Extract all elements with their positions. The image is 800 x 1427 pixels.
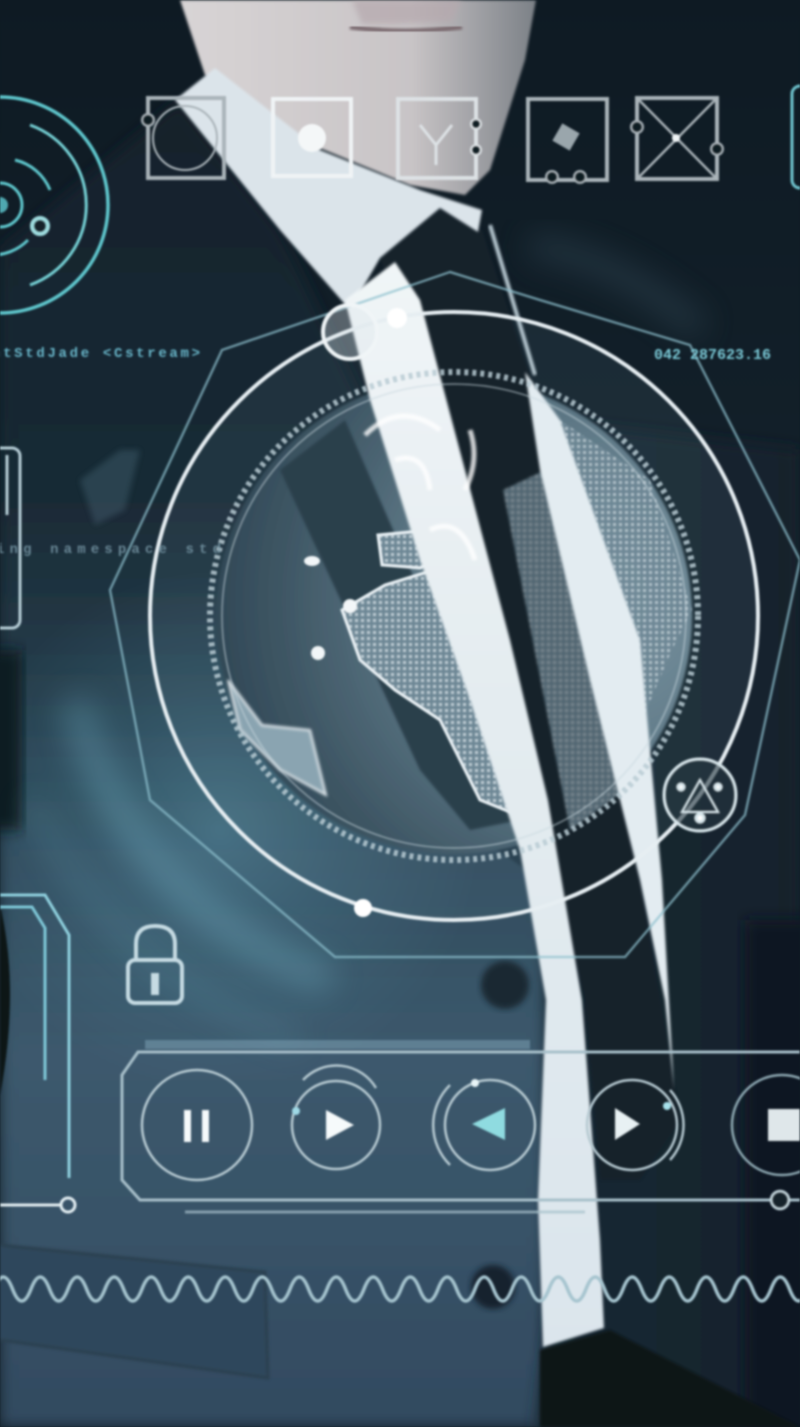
lapel shading: [275, 400, 540, 880]
globe backdrop: [150, 312, 758, 920]
upper right grid: [500, 410, 692, 780]
dark edge strip: [0, 650, 22, 830]
ring dot top: [387, 308, 407, 328]
radar node: [32, 218, 48, 234]
inner line: [0, 907, 45, 1080]
radar rings: [0, 97, 108, 313]
ring dot bottom: [354, 899, 372, 917]
outer bracket: [0, 895, 69, 1178]
triangle node icon: [664, 759, 736, 831]
mouth line: [350, 27, 462, 31]
dark band right: [745, 920, 800, 1427]
jacket right side: [535, 420, 800, 1427]
jacket left side: [0, 100, 545, 1427]
numeric text right: 042 287623.16: [654, 347, 771, 364]
shirt collar: [175, 68, 482, 310]
play button: [292, 1066, 380, 1169]
outer octagon: [110, 272, 800, 957]
inner thin ring: [222, 384, 686, 848]
left side tab: [0, 448, 20, 628]
island dots: [304, 556, 357, 660]
right side tab: [792, 86, 800, 188]
faded code text: ing namespace std: [0, 542, 221, 558]
rewind button: [433, 1079, 535, 1170]
radar widget: [0, 97, 108, 313]
icon: diamond square: [528, 99, 607, 183]
outer white ring: [150, 312, 758, 920]
globe face: [216, 378, 692, 854]
lock icon: [128, 926, 182, 1003]
lapel over globe: [280, 420, 520, 830]
face: [180, 0, 536, 195]
media control panel: [122, 1040, 800, 1212]
pause button: [142, 1070, 252, 1180]
jacket button: [481, 961, 529, 1009]
dotted inner ring: [210, 372, 698, 860]
lower button: [471, 1265, 515, 1309]
panel top band: [145, 1040, 530, 1049]
South America / Africa dotted landmass: [342, 568, 540, 820]
ring node circle: [323, 305, 377, 359]
next button: [587, 1080, 684, 1170]
globe rings: [110, 272, 800, 957]
light streak right shoulder: [530, 245, 700, 330]
top icon row: [142, 98, 723, 183]
teal energy arcs: [30, 700, 330, 1040]
icon: node square: [398, 99, 481, 178]
globe disc: [80, 312, 758, 920]
dark gulf: [545, 729, 605, 790]
northern landmass: [378, 530, 450, 568]
panel right node: [771, 1191, 789, 1209]
jacket pocket: [0, 1245, 268, 1378]
icon: circle square: [142, 98, 224, 178]
shirt strip right: [525, 372, 674, 1090]
faint left map: [80, 450, 140, 525]
upper lip: [352, 0, 462, 24]
wave line: [0, 1277, 800, 1301]
tie: [380, 208, 680, 1180]
jacket glow: [0, 560, 545, 1080]
icon: cross square: [631, 98, 723, 179]
panel lower line: [185, 1210, 585, 1214]
baseline node: [61, 1198, 75, 1212]
lower left land: [228, 680, 326, 795]
baseline: [0, 1204, 60, 1206]
lower dark tie end: [540, 1330, 800, 1427]
panel frame: [122, 1052, 800, 1200]
person: [175, 0, 680, 1347]
dark hand shape: [0, 905, 10, 1095]
data text: [0, 346, 771, 558]
icon: play square: [273, 99, 351, 176]
continent outlines on shirt: [365, 416, 475, 560]
shirt strip left: [345, 262, 604, 1347]
tie grid over globe: [503, 470, 625, 830]
continents: [80, 410, 692, 820]
left bracket panel: [0, 895, 75, 1212]
thin tie edge: [490, 225, 535, 375]
stop button: [732, 1075, 800, 1175]
